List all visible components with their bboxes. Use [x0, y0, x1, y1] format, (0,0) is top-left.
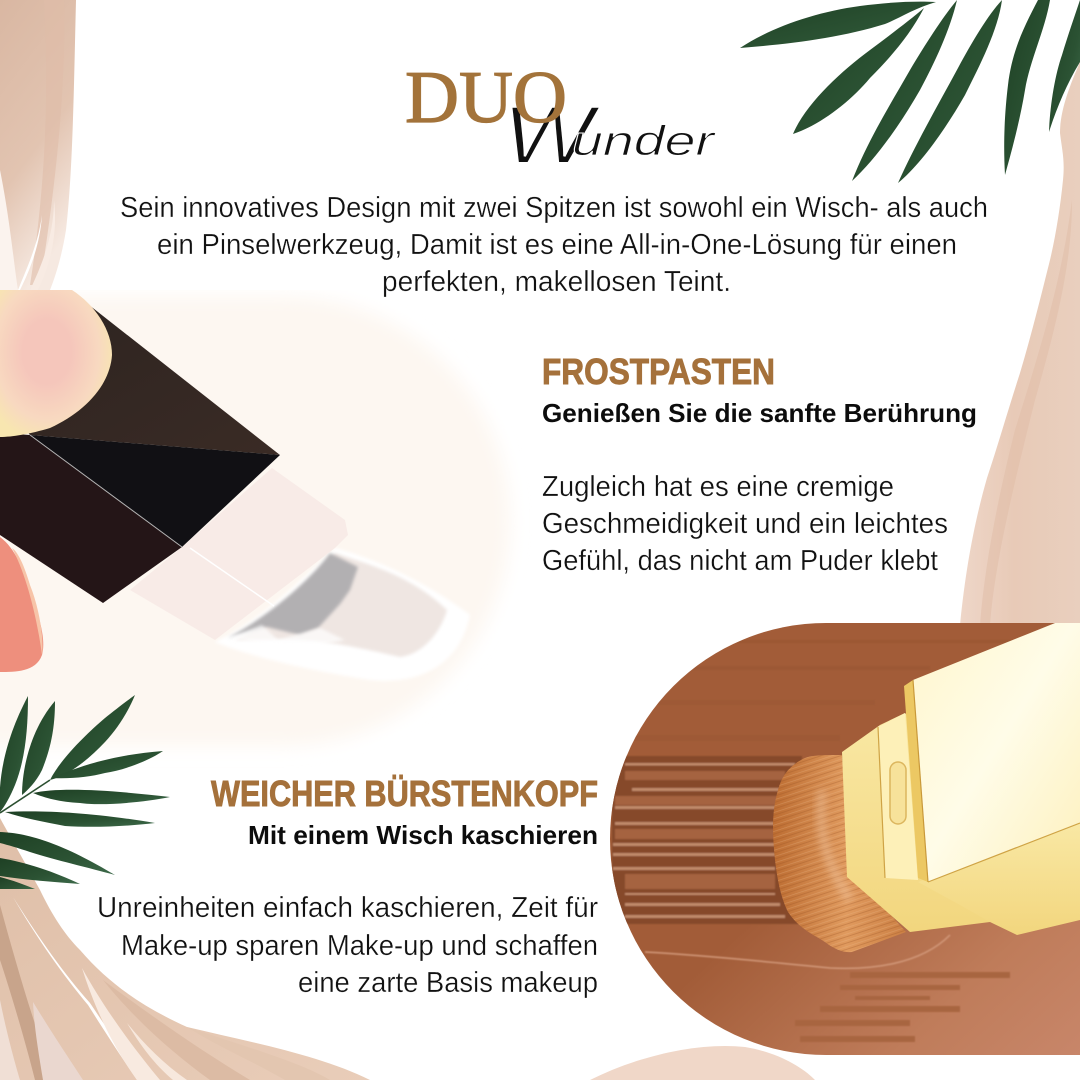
bristles — [773, 755, 906, 952]
slot — [890, 762, 906, 824]
foundation smear: bottom left — [0, 818, 370, 1080]
gold brush head collar — [842, 713, 990, 932]
subheading: Frostpasten: Genießen Sie die sanfte Berührung — [542, 398, 977, 428]
title word: DUO: DUO — [405, 57, 567, 139]
brown foundation background — [600, 620, 1080, 1060]
photo panel: brown swatch with gold brush — [600, 613, 1080, 1060]
body: Weicher Bürstenkopf: Make-up sparen Make-up und schaffen — [121, 930, 598, 962]
title: DUO Wunder — [405, 57, 717, 181]
title script: Wunder: under — [572, 117, 717, 164]
cream swatch — [215, 548, 470, 681]
gold face — [913, 613, 1080, 882]
gold lower body — [918, 823, 1080, 935]
body: Frostpasten: Gefühl, das nicht am Puder klebt — [542, 545, 938, 577]
foundation smear: top left — [0, 0, 76, 290]
subheading: Weicher Bürstenkopf: Mit einem Wisch kaschieren — [248, 820, 598, 850]
body: Frostpasten: Geschmeidigkeit und ein leichtes — [542, 508, 948, 540]
black handle — [0, 290, 280, 603]
lower finger — [0, 537, 43, 672]
cream background — [0, 296, 510, 746]
body: Weicher Bürstenkopf: Unreinheiten einfach kaschieren, Zeit für — [97, 892, 598, 924]
palm leaves: top right — [740, 0, 1080, 183]
intro paragraph: Sein innovatives Design mit zwei Spitzen ist sowohl ein Wisch- als auch — [120, 192, 988, 224]
body: Weicher Bürstenkopf — [97, 892, 598, 999]
brush strokes — [612, 640, 1010, 1042]
foundation smear: bottom centre — [590, 1046, 815, 1080]
intro paragraph: ein Pinselwerkzeug, Damit ist es eine All-in-One-Lösung für einen — [157, 229, 957, 261]
body: Frostpasten: Zugleich hat es eine cremige — [542, 471, 894, 503]
intro paragraph: perfekten, makellosen Teint. — [382, 266, 731, 298]
title script: Wunder: W — [503, 90, 601, 181]
photo panel: cream swatch with applicator — [0, 290, 510, 746]
heading: Weicher Bürstenkopf: WEICHER BÜRSTENKOPF — [211, 773, 598, 814]
section: Weicher Bürstenkopf — [97, 773, 598, 999]
thumb — [0, 290, 112, 437]
gold rim — [904, 680, 928, 882]
body: Frostpasten — [542, 471, 948, 577]
white applicator tip — [130, 468, 348, 640]
palm leaves: lower left — [0, 695, 170, 889]
intro paragraph — [120, 192, 988, 298]
section: Frostpasten — [542, 351, 977, 577]
foundation smear: right side — [960, 62, 1080, 625]
heading: Frostpasten: FROSTPASTEN — [542, 351, 775, 392]
body: Weicher Bürstenkopf: eine zarte Basis makeup — [298, 967, 598, 999]
